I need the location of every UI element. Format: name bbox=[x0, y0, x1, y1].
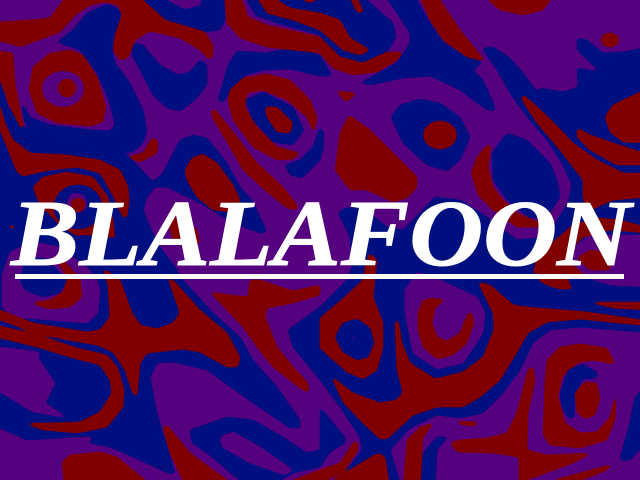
title: BLALAFOON bbox=[10, 182, 634, 286]
nested purple centres bbox=[42, 71, 354, 339]
title underline bbox=[15, 274, 624, 279]
nested red centres bbox=[8, 33, 619, 419]
nested blue rings bbox=[20, 92, 598, 418]
